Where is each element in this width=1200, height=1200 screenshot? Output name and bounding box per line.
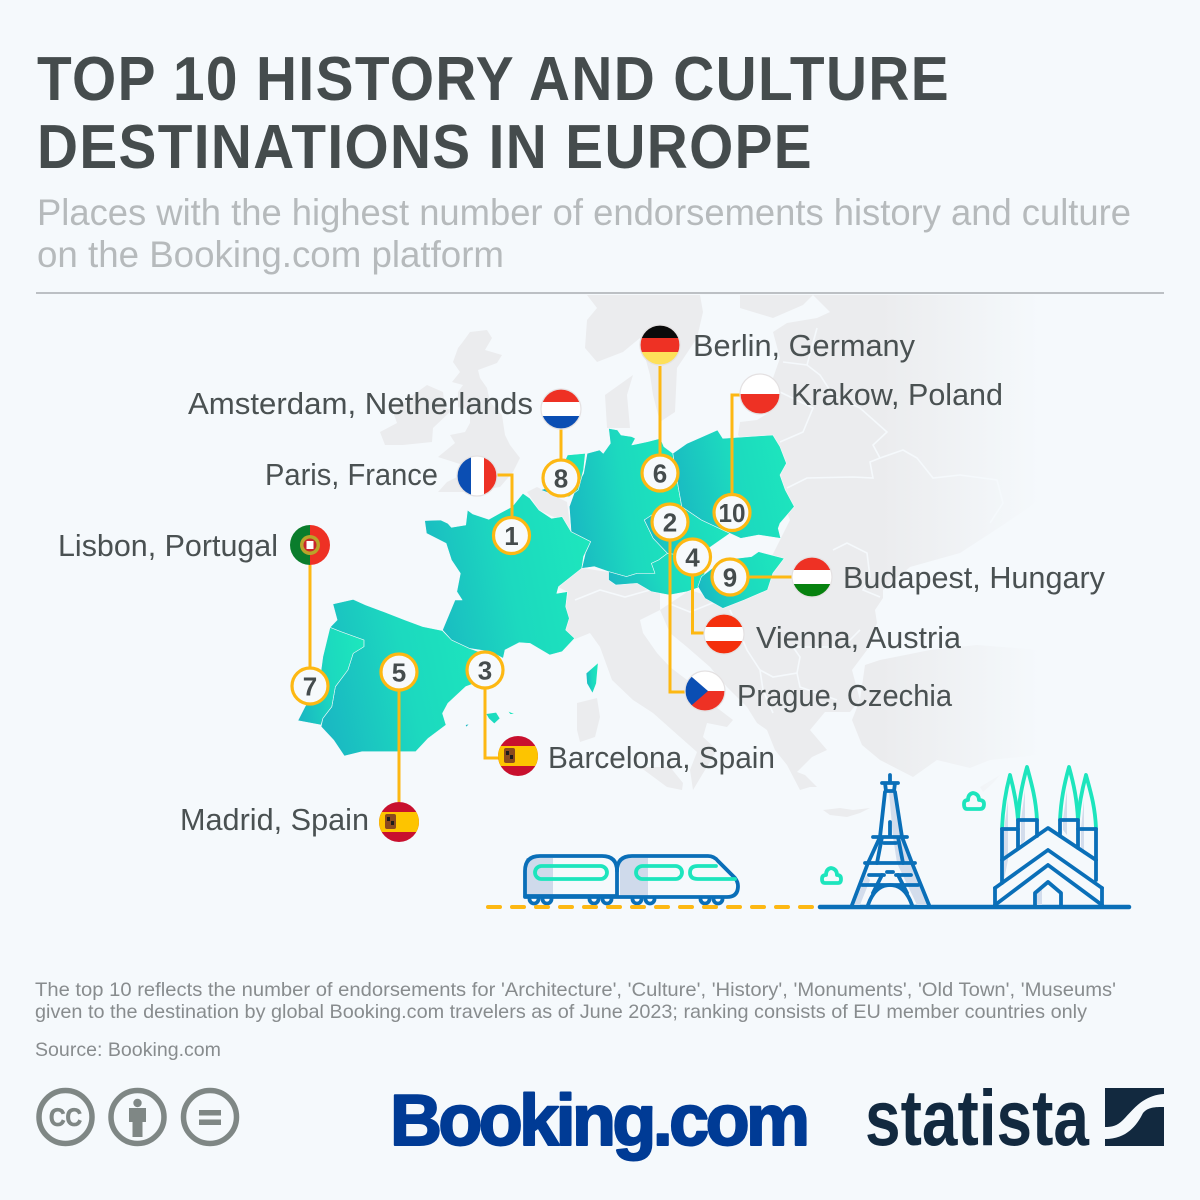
grey background countries — [380, 295, 1040, 817]
highlighted countries — [298, 428, 794, 756]
rank markers: 8 — [554, 464, 568, 494]
destination: Paris, France — [265, 456, 497, 496]
logo: statista mark — [1105, 1088, 1164, 1146]
Alps and Italy — [558, 568, 733, 790]
destination: Krakow, Poland — [740, 374, 1003, 414]
illustration: cathedral — [995, 767, 1102, 905]
Finland — [740, 295, 813, 318]
logo: Booking.com: Booking.com — [390, 1081, 810, 1161]
destination: Barcelona, Spain: Barcelona, Spain — [548, 740, 775, 775]
Denmark — [605, 375, 633, 428]
map of Europe — [298, 295, 1040, 817]
illustration: cloud right — [964, 793, 984, 809]
footnote: The top 10 reflects the number of endorsements for 'Architecture', 'Culture', 'History', 'Monuments', 'Old Town', 'Museums' — [35, 979, 1116, 1001]
destination: Amsterdam, Netherlands: Amsterdam, Netherlands — [188, 386, 533, 421]
country: Netherlands — [541, 453, 585, 497]
rank markers: 10 — [718, 498, 746, 528]
icon: creative commons CC — [39, 1090, 92, 1144]
footnote — [35, 979, 1116, 1023]
island: Balearics — [466, 712, 514, 727]
grey country borders — [575, 328, 1003, 713]
Ireland — [380, 385, 452, 445]
Sicily — [640, 767, 683, 790]
illustration: train — [525, 856, 738, 904]
destination: Prague, Czechia — [685, 671, 953, 713]
Belgium — [527, 487, 571, 532]
island: Corsica — [586, 663, 598, 693]
country: Czechia — [644, 503, 730, 557]
rank markers: 2 — [663, 508, 677, 538]
logo: statista wordmark: statista — [865, 1073, 1090, 1162]
country: Germany — [569, 428, 682, 577]
header rule — [36, 292, 1164, 294]
rank markers: 9 — [723, 562, 737, 592]
Cyprus — [980, 775, 1000, 792]
country: Austria — [609, 553, 709, 595]
destination: Prague, Czechia: Prague, Czechia — [737, 678, 953, 713]
destination: Madrid, Spain: Madrid, Spain — [180, 802, 369, 837]
destination: Budapest, Hungary: Budapest, Hungary — [843, 560, 1105, 595]
footnote: given to the destination by global Booking.com travelers as of June 2023; ranking consists of EU member countries only — [35, 1001, 1087, 1023]
source: Source: Booking.com — [35, 1039, 221, 1061]
illustration: Eiffel Tower — [852, 775, 929, 905]
rank markers — [292, 455, 750, 704]
destination: Vienna, Austria — [704, 614, 962, 655]
Great Britain — [438, 330, 520, 492]
country: Poland — [673, 430, 794, 538]
rank markers: 5 — [392, 658, 406, 688]
country: Portugal — [298, 627, 364, 725]
title: DESTINATIONS IN EUROPE — [37, 113, 813, 182]
rank markers: 6 — [653, 458, 667, 488]
subtitle — [37, 192, 1131, 275]
destination: Barcelona, Spain — [498, 736, 775, 776]
subtitle: Places with the highest number of endorsements history and culture — [37, 192, 1131, 233]
Crete — [823, 808, 870, 817]
destination: Krakow, Poland: Krakow, Poland — [791, 377, 1003, 412]
rank markers: 7 — [303, 672, 317, 702]
destination: Lisbon, Portugal: Lisbon, Portugal — [58, 528, 278, 563]
dashed rail track — [488, 905, 816, 909]
Scandinavia — [585, 295, 703, 422]
subtitle: on the Booking.com platform — [37, 234, 504, 275]
rank markers: 1 — [504, 521, 519, 551]
country: Hungary — [698, 552, 784, 608]
icon: no derivatives — [184, 1090, 236, 1144]
Eastern Europe and Balkans — [660, 295, 1040, 790]
Turkey — [852, 645, 1040, 777]
ground line — [820, 905, 1129, 909]
Sardinia — [577, 698, 600, 742]
icon: creative commons CC: CC — [49, 1104, 82, 1132]
destination: Paris, France: Paris, France — [265, 457, 438, 492]
rank markers: 3 — [478, 656, 492, 686]
title: TOP 10 HISTORY AND CULTURE — [37, 45, 950, 114]
illustration: cloud left — [822, 868, 841, 883]
country: Spain — [321, 599, 494, 756]
destination: Vienna, Austria: Vienna, Austria — [756, 620, 962, 655]
country: France — [425, 493, 591, 658]
title — [37, 45, 950, 182]
rank markers: 4 — [685, 542, 700, 572]
destination: Berlin, Germany: Berlin, Germany — [693, 328, 915, 363]
icon: attribution — [111, 1090, 164, 1144]
connector lines — [310, 366, 793, 802]
